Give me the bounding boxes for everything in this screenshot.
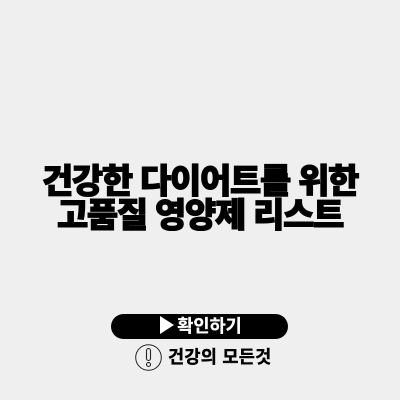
title line 2: 고품질 영양제 리스트	[57, 197, 343, 235]
icon: exclamation circle	[135, 344, 162, 371]
brand name: 건강의 모든것	[168, 347, 272, 367]
title	[42, 163, 360, 235]
button icon: play triangle	[160, 316, 174, 334]
button label: 확인하기	[177, 316, 242, 336]
title line 1: 건강한 다이어트를 위한	[42, 163, 358, 201]
brand row	[135, 344, 272, 371]
button: confirm	[111, 314, 288, 339]
